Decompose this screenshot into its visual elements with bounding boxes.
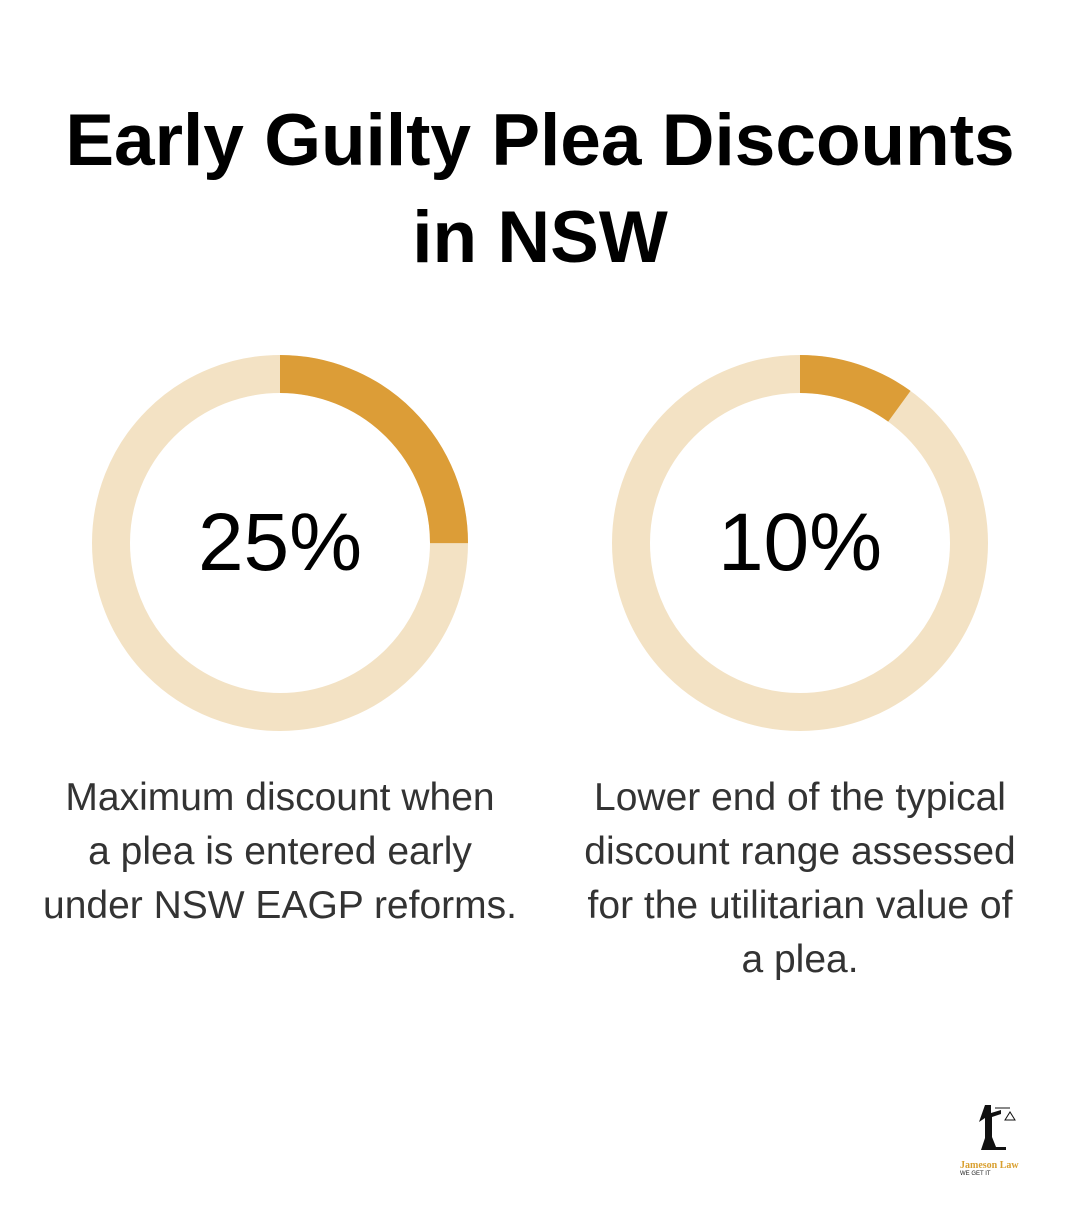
donut chart: 10%: 10%	[718, 497, 882, 588]
donut chart: 10%	[612, 355, 988, 731]
caption: 25%: Maximum discount when	[65, 776, 495, 819]
caption: 10%: a plea.	[741, 938, 859, 981]
logo: Jameson Law: Jameson Law	[960, 1160, 1019, 1171]
caption: 10%: discount range assessed	[584, 830, 1016, 873]
caption: 10%	[584, 776, 1016, 981]
caption: 25%: a plea is entered early	[88, 830, 472, 873]
caption: 10%: for the utilitarian value of	[588, 884, 1012, 927]
title: Early Guilty Plea Discounts	[65, 100, 1015, 181]
caption: 25%	[43, 776, 517, 927]
caption: 10%: Lower end of the typical	[594, 776, 1006, 819]
title	[65, 100, 1015, 278]
logo: Jameson Law: WE GET IT	[960, 1171, 991, 1177]
caption: 25%: under NSW EAGP reforms.	[43, 884, 517, 927]
donut chart: 25%	[92, 355, 468, 731]
title: in NSW	[412, 197, 668, 278]
donut chart: 25%: 25%	[198, 497, 362, 588]
logo: Jameson Law	[960, 1105, 1019, 1177]
